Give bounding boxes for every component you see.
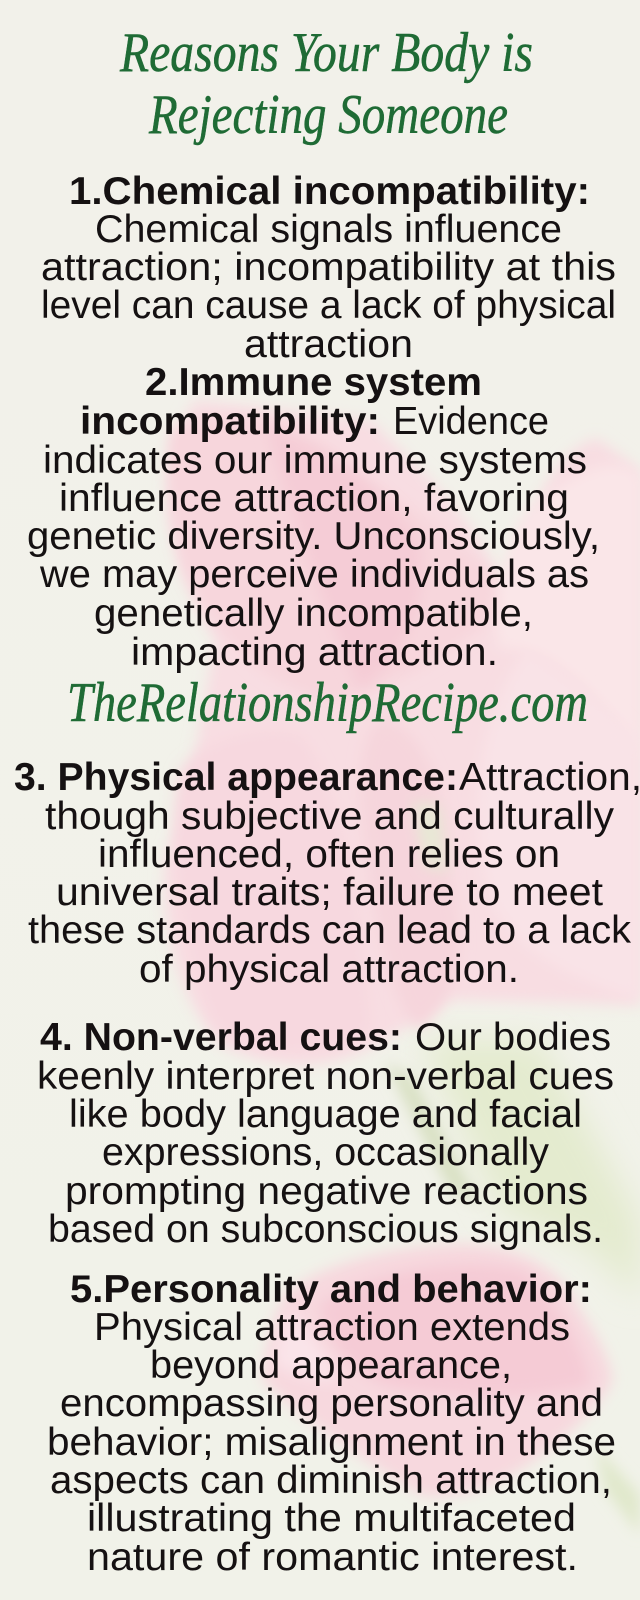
section 5: personality and behavior: aspects can diminish attraction,	[50, 1459, 612, 1502]
section 1: chemical incompatibility: 1.Chemical incompatibility:	[69, 170, 590, 213]
section 2: immune system incompatibility: genetic diversity. Unconsciously,	[27, 515, 600, 558]
section 4: non-verbal cues: prompting negative reactions	[65, 1170, 588, 1213]
section 1: chemical incompatibility	[41, 170, 616, 366]
section 2: immune system incompatibility: Evidence	[393, 400, 549, 443]
section 3: physical appearance: these standards can lead to a lack	[28, 909, 632, 952]
section 4: non-verbal cues: 4. Non-verbal cues:	[40, 1016, 402, 1059]
section 2: immune system incompatibility: indicates our immune systems	[43, 439, 587, 482]
section 3: physical appearance: universal traits; failure to meet	[56, 871, 603, 914]
tulip photo: lower flower	[262, 1244, 612, 1497]
section 3: physical appearance: influenced, often relies on	[98, 833, 560, 876]
title	[119, 22, 533, 146]
section 1: chemical incompatibility: attraction; incompatibility at this	[41, 246, 616, 289]
section 3: physical appearance: Attraction,	[459, 756, 640, 799]
section 4: non-verbal cues: keenly interpret non-verbal cues	[37, 1055, 614, 1098]
section 5: personality and behavior: Physical attraction extends	[94, 1306, 570, 1349]
section 2: immune system incompatibility: influence attraction, favoring	[59, 477, 569, 520]
title: Rejecting Someone	[148, 84, 508, 146]
section 3: physical appearance: though subjective and culturally	[45, 795, 615, 838]
section 5: personality and behavior: nature of romantic interest.	[87, 1536, 578, 1579]
section 2: immune system incompatibility: genetically incompatible,	[94, 592, 533, 635]
section 2: immune system incompatibility: 2.Immune system	[145, 361, 482, 404]
tulip photo: upper flowers and stems	[164, 400, 640, 1535]
section 5: personality and behavior: 5.Personality and behavior:	[70, 1268, 592, 1311]
section 5: personality and behavior: encompassing personality and	[60, 1382, 603, 1425]
section 5: personality and behavior: illustrating the multifaceted	[87, 1497, 576, 1540]
section 3: physical appearance: of physical attraction.	[139, 948, 519, 991]
section 3: physical appearance	[14, 756, 640, 991]
section 2: immune system incompatibility: incompatibility:	[80, 400, 380, 443]
section 2: immune system incompatibility: impacting attraction.	[131, 631, 498, 674]
section 1: chemical incompatibility: level can cause a lack of physical	[41, 284, 616, 327]
section 2: immune system incompatibility	[27, 361, 600, 674]
section 4: non-verbal cues	[37, 1016, 614, 1251]
section 1: chemical incompatibility: Chemical signals influence	[95, 208, 562, 251]
section 4: non-verbal cues: Our bodies	[415, 1016, 611, 1059]
section 2: immune system incompatibility: we may perceive individuals as	[39, 553, 589, 596]
section 4: non-verbal cues: based on subconscious signals.	[48, 1208, 603, 1251]
section 4: non-verbal cues: like body language and facial	[69, 1093, 582, 1136]
section 1: chemical incompatibility: attraction	[244, 323, 413, 366]
section 5: personality and behavior	[47, 1268, 616, 1579]
section 4: non-verbal cues: expressions, occasionally	[102, 1131, 550, 1174]
section 5: personality and behavior: behavior; misalignment in these	[47, 1421, 616, 1464]
section 3: physical appearance: 3. Physical appearance:	[14, 756, 458, 799]
title: Reasons Your Body is	[119, 22, 533, 84]
section 5: personality and behavior: beyond appearance,	[150, 1344, 512, 1387]
